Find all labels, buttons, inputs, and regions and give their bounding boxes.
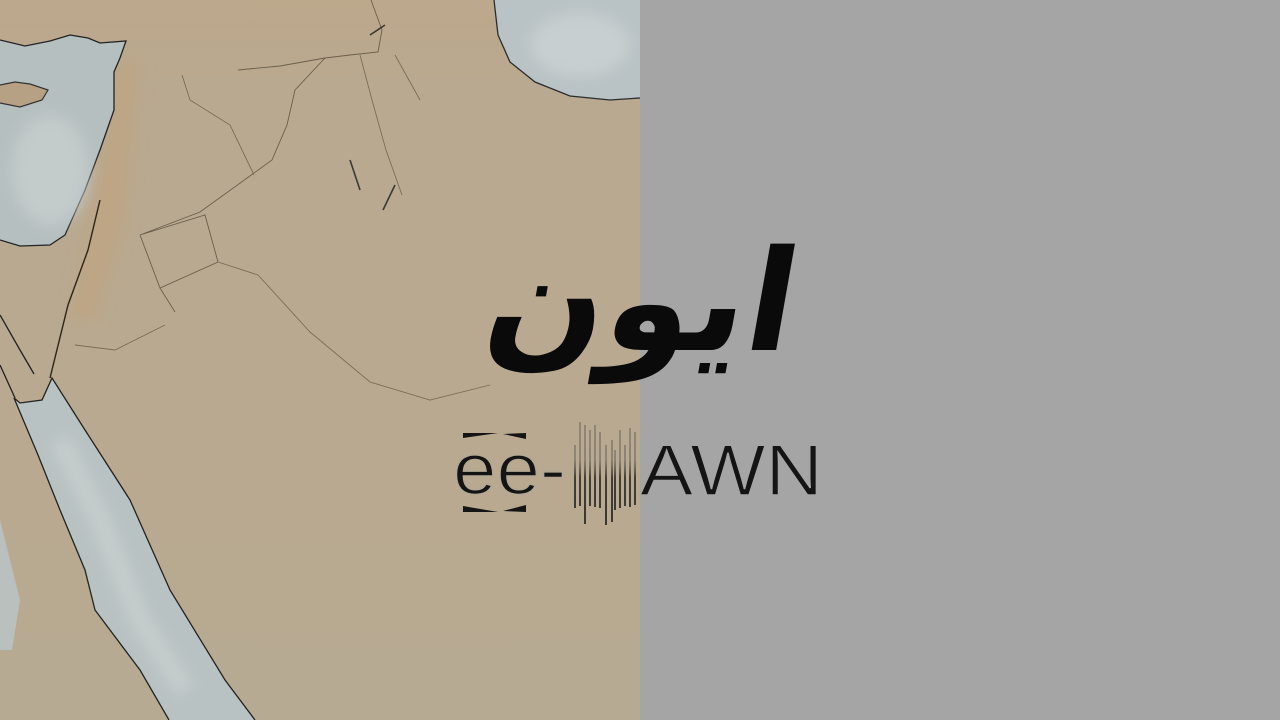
title: Urdu wordmark: ایون: [474, 221, 811, 385]
logo waveform: [575, 422, 635, 525]
logo text: AWN: AWN: [640, 431, 823, 511]
water: lower-left coast: [0, 520, 20, 650]
map borders: [0, 0, 490, 400]
logo text: ee-: ee-: [453, 430, 566, 510]
water: Caspian sea: [494, 0, 640, 100]
water: Red Sea: [14, 378, 255, 720]
logo brackets: [463, 433, 526, 512]
water: Mediterranean sea: [0, 35, 126, 246]
logo: ee-DAWN: [453, 422, 823, 525]
infographic canvas: [0, 0, 816, 720]
panel: grey right half: [640, 0, 1280, 720]
panel: map background: [0, 0, 640, 720]
